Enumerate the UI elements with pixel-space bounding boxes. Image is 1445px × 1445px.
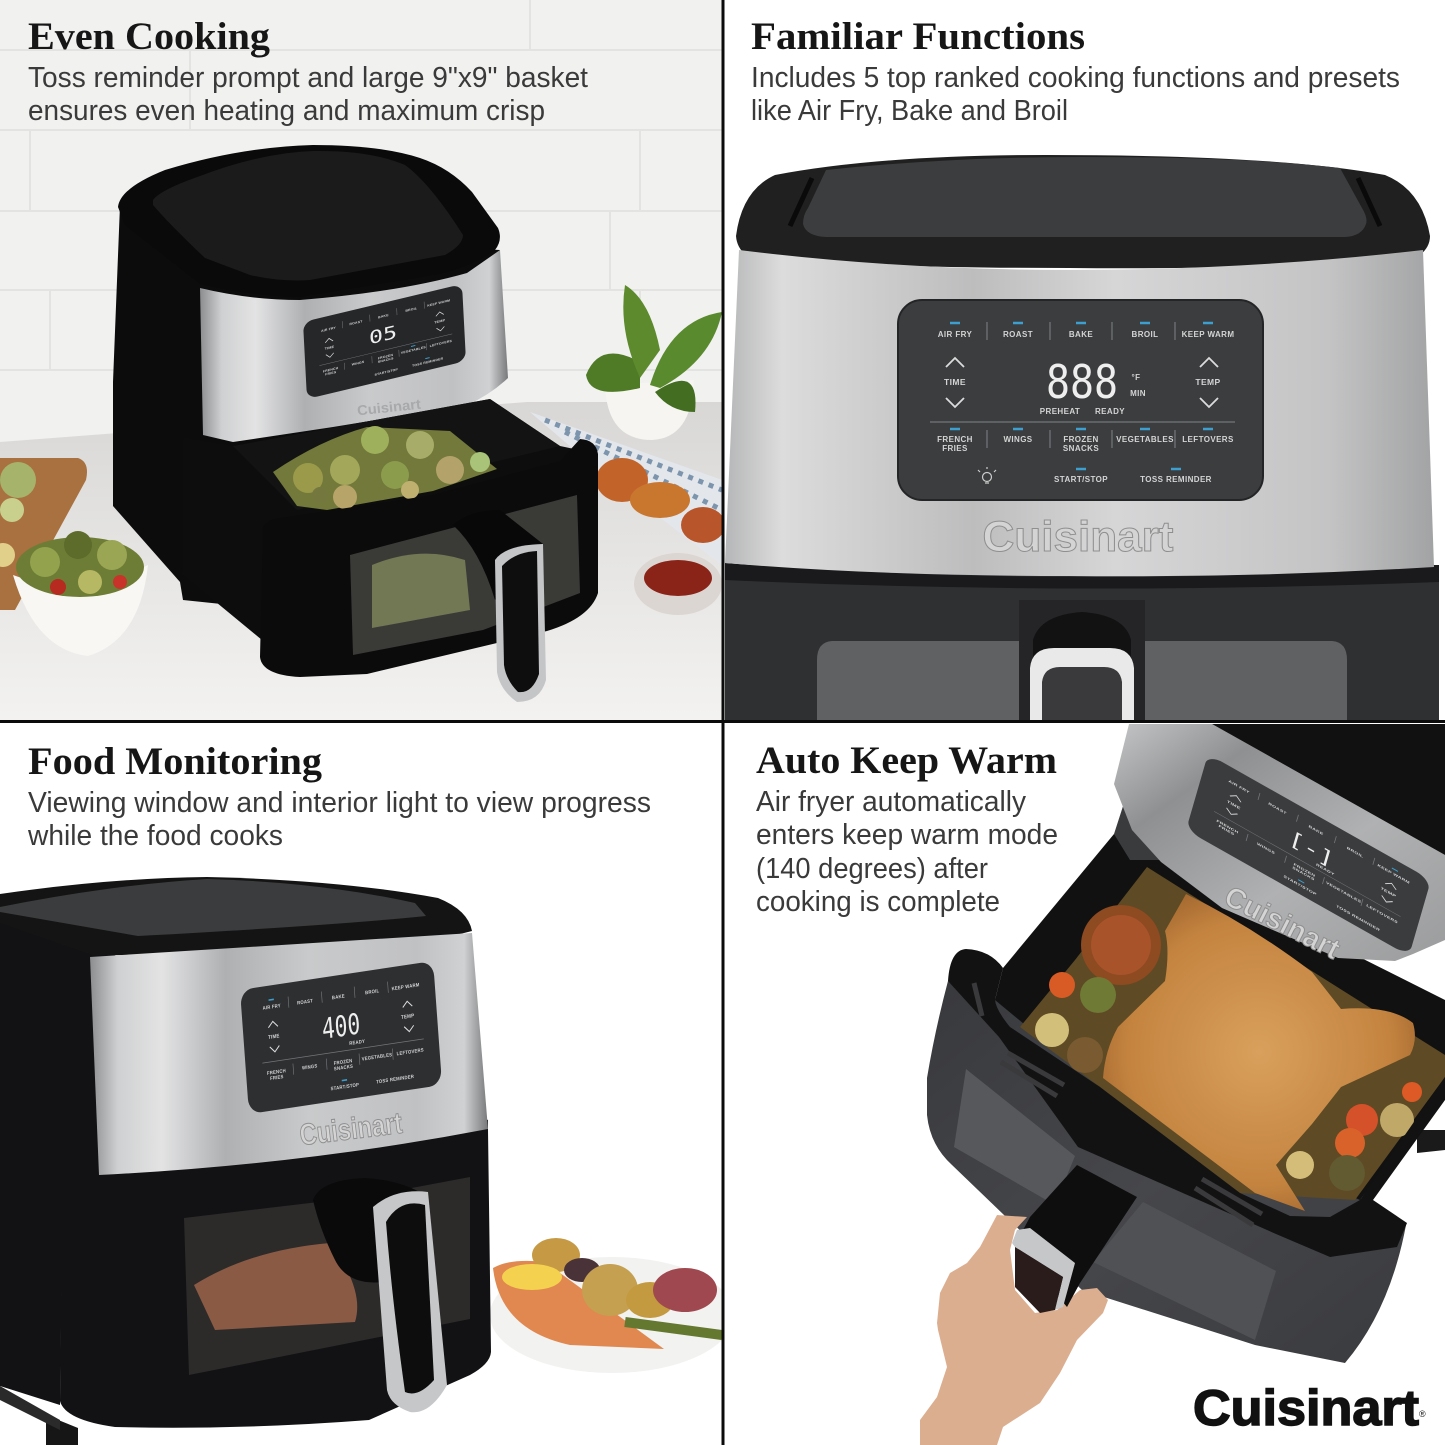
drawer window left — [954, 1069, 1075, 1205]
control panel: BAKE — [378, 313, 389, 319]
control panel: [-] — [1286, 827, 1336, 872]
stainless steel band — [725, 250, 1434, 576]
control panel: VEGETABLES — [362, 1052, 392, 1062]
control panel: KEEP WARM — [1377, 863, 1410, 885]
text: auto keep warm description — [756, 786, 1058, 918]
text: food monitoring description: while the food cooks — [27, 820, 283, 852]
control panel: TEMP — [434, 318, 446, 325]
drawer handle — [1019, 600, 1145, 720]
lid inner — [0, 879, 426, 936]
vegetables — [1035, 905, 1422, 1191]
control panel — [1186, 754, 1431, 956]
drawer inner wall — [995, 834, 1445, 1200]
control panel: START/STOP — [375, 367, 399, 377]
handle and hand — [920, 1165, 1137, 1445]
drawer viewing window — [350, 495, 580, 655]
function labels: TEMP — [1195, 377, 1221, 387]
brand logo: Cuisinart — [1193, 1380, 1419, 1436]
function labels: °F — [1132, 373, 1140, 382]
logo: Cuisinart — [1219, 881, 1345, 966]
control panel: FRIES — [1218, 824, 1235, 836]
heading: auto keep warm: Auto Keep Warm — [756, 739, 1057, 782]
control panel: FRIES — [325, 370, 337, 376]
text: auto keep warm description: (140 degrees) after — [756, 853, 988, 885]
roasted brussels sprouts — [273, 426, 497, 510]
kitchen counter — [0, 402, 722, 720]
control panel: FRENCH — [1216, 819, 1239, 834]
logo: Cuisinart — [982, 513, 1174, 561]
function labels — [937, 330, 1234, 484]
control panel: LEFTOVERS — [430, 339, 453, 348]
control panel: LEFTOVERS — [396, 1047, 424, 1057]
text: food monitoring description: Viewing window and interior light to view progress — [28, 787, 651, 819]
arrows — [946, 358, 1218, 407]
handle steel tip — [1012, 1228, 1075, 1310]
function labels: READY — [1095, 407, 1125, 416]
control panel: FROZEN — [334, 1058, 353, 1066]
drawer window right — [1093, 1202, 1276, 1340]
viewing window left — [817, 641, 1040, 720]
control panel: ROAST — [1268, 802, 1287, 815]
drawer rim — [948, 949, 1445, 1257]
function labels: KEEP WARM — [1182, 330, 1234, 339]
control panel: FRIES — [270, 1074, 284, 1081]
function labels: SNACKS — [1063, 444, 1099, 453]
stainless steel band — [90, 933, 488, 1175]
control panel — [303, 284, 466, 399]
control panel: KEEP WARM — [391, 982, 420, 991]
control panel: TOSS REMINDER — [376, 1074, 415, 1085]
base behind drawer — [1417, 1130, 1445, 1153]
text: even cooking description: ensures even heating and maximum crisp — [28, 95, 545, 127]
control panel: AIR FRY — [1228, 779, 1250, 794]
drawer handle — [313, 1178, 447, 1412]
roast chicken — [1103, 894, 1415, 1211]
control panel: LEFTOVERS — [1366, 903, 1398, 924]
control panel: START/STOP — [330, 1082, 359, 1091]
food behind window — [194, 1243, 357, 1330]
viewing window — [184, 1177, 470, 1375]
function labels: BROIL — [1132, 330, 1158, 339]
function labels: BAKE — [1069, 330, 1093, 339]
lower drawer — [60, 1130, 491, 1428]
text: auto keep warm description: enters keep warm mode — [756, 819, 1058, 851]
text: familiar functions description — [751, 62, 1400, 127]
control panel: READY — [1316, 863, 1335, 876]
platter of chicken — [530, 412, 725, 565]
lid inner — [153, 151, 463, 280]
drawer front — [260, 439, 598, 677]
dipping sauce bowl — [634, 553, 722, 615]
control panel: TOSS REMINDER — [1336, 904, 1381, 932]
function labels: ROAST — [1003, 330, 1033, 339]
heading: food monitoring: Food Monitoring — [28, 740, 323, 783]
indicator lights — [950, 323, 1213, 469]
control panel: BROIL — [365, 988, 380, 995]
handle grip — [1015, 1165, 1137, 1307]
control panel: 05 — [369, 321, 398, 349]
logo: Cuisinart — [356, 396, 422, 418]
control panel: VEGETABLES — [401, 345, 427, 355]
drawer side and opening — [218, 399, 572, 639]
control panel: WINGS — [352, 360, 365, 367]
function labels: TOSS REMINDER — [1140, 475, 1212, 484]
function labels: AIR FRY — [938, 330, 973, 339]
function labels: FRENCH — [937, 435, 973, 444]
control panel: START/STOP — [1283, 874, 1317, 896]
handle end cap — [1015, 1247, 1063, 1313]
control panel: AIR FRY — [321, 326, 337, 333]
control panel: TOSS REMINDER — [412, 357, 444, 368]
function labels: LEFTOVERS — [1182, 435, 1234, 444]
control panel: TIME — [1226, 800, 1242, 811]
function labels: PREHEAT — [1040, 407, 1080, 416]
control panel: FRENCH — [323, 366, 339, 374]
control panel: AIR FRY — [262, 1003, 282, 1011]
control panel: BAKE — [332, 993, 345, 1000]
control panel: FRENCH — [267, 1068, 286, 1076]
pulled-out drawer — [182, 399, 598, 702]
fryer lid top — [736, 155, 1430, 268]
control panel: FROZEN — [1293, 862, 1316, 878]
text: even cooking description: Toss reminder prompt and large 9"x9" basket — [28, 62, 588, 94]
text: food monitoring description — [27, 787, 651, 852]
icon: light bulb — [978, 467, 996, 483]
control panel: 400 — [321, 1008, 361, 1046]
control panel: ROAST — [297, 998, 313, 1006]
air fryer body — [113, 145, 508, 608]
control panel: BAKE — [1308, 824, 1324, 836]
control panel: SNACKS — [378, 356, 394, 364]
viewing window right — [1125, 641, 1347, 720]
heading: familiar functions: Familiar Functions — [751, 15, 1085, 58]
control panel: TIME — [325, 345, 335, 351]
bowl of sprouts — [13, 531, 148, 656]
icon: hand — [920, 1215, 1108, 1445]
lower body — [725, 565, 1439, 720]
panel: even cooking — [0, 0, 725, 720]
logo: Cuisinart — [298, 1107, 404, 1152]
food behind window — [372, 554, 470, 628]
air fryer body — [0, 877, 491, 1445]
control panel: SNACKS — [1292, 866, 1315, 881]
drawer vents — [974, 983, 1262, 1225]
control panel: TEMP — [1380, 886, 1397, 899]
control panel: READY — [349, 1038, 366, 1046]
control panel: WINGS — [302, 1063, 318, 1071]
function labels: FRIES — [942, 444, 968, 453]
panel: food monitoring — [0, 877, 734, 1445]
basil plant — [586, 285, 722, 440]
panel: familiar functions — [725, 155, 1439, 720]
function labels: TIME — [944, 377, 966, 387]
function labels: START/STOP — [1054, 475, 1108, 484]
appliance head and lid — [1114, 724, 1445, 961]
text: even cooking description — [28, 62, 588, 127]
text: auto keep warm description: cooking is complete — [756, 886, 1000, 918]
control panel: WINGS — [1257, 842, 1275, 855]
text: auto keep warm description: Air fryer automatically — [756, 786, 1026, 818]
foot — [46, 1420, 78, 1445]
drawer handle — [453, 510, 546, 702]
function labels: VEGETABLES — [1116, 435, 1174, 444]
control panel: BROIL — [1346, 846, 1364, 859]
cutting board with greens — [0, 458, 87, 610]
control panel — [898, 300, 1263, 500]
open drawer — [927, 834, 1445, 1363]
plate of salmon — [490, 1238, 734, 1373]
control panel: ROAST — [349, 319, 363, 326]
control panel — [240, 961, 442, 1114]
digital display: 888 — [1046, 355, 1118, 409]
control panel: SNACKS — [334, 1063, 353, 1072]
lid outer rim — [118, 145, 500, 250]
control panel: TEMP — [401, 1013, 415, 1021]
kitchen wall background — [0, 0, 722, 460]
control panel: BROIL — [405, 306, 417, 313]
drawer outer — [927, 981, 1406, 1363]
function labels: WINGS — [1003, 435, 1033, 444]
panel: auto keep warm — [920, 724, 1445, 1445]
control panel: VEGETABLES — [1326, 881, 1362, 904]
text: familiar functions description: like Air Fry, Bake and Broil — [751, 95, 1068, 127]
control panel: KEEP WARM — [427, 298, 450, 308]
stainless steel band — [200, 250, 508, 442]
heading: even cooking: Even Cooking — [28, 15, 271, 58]
lid outer — [0, 877, 472, 955]
brand logo: ® — [1419, 1409, 1426, 1419]
control panel: FROZEN — [378, 353, 394, 360]
text: familiar functions description: Includes 5 top ranked cooking functions and presets — [751, 62, 1400, 94]
function labels: MIN — [1130, 389, 1146, 398]
roast food bed — [1020, 867, 1445, 1200]
function labels: FROZEN — [1063, 435, 1099, 444]
control panel: TIME — [268, 1033, 280, 1041]
